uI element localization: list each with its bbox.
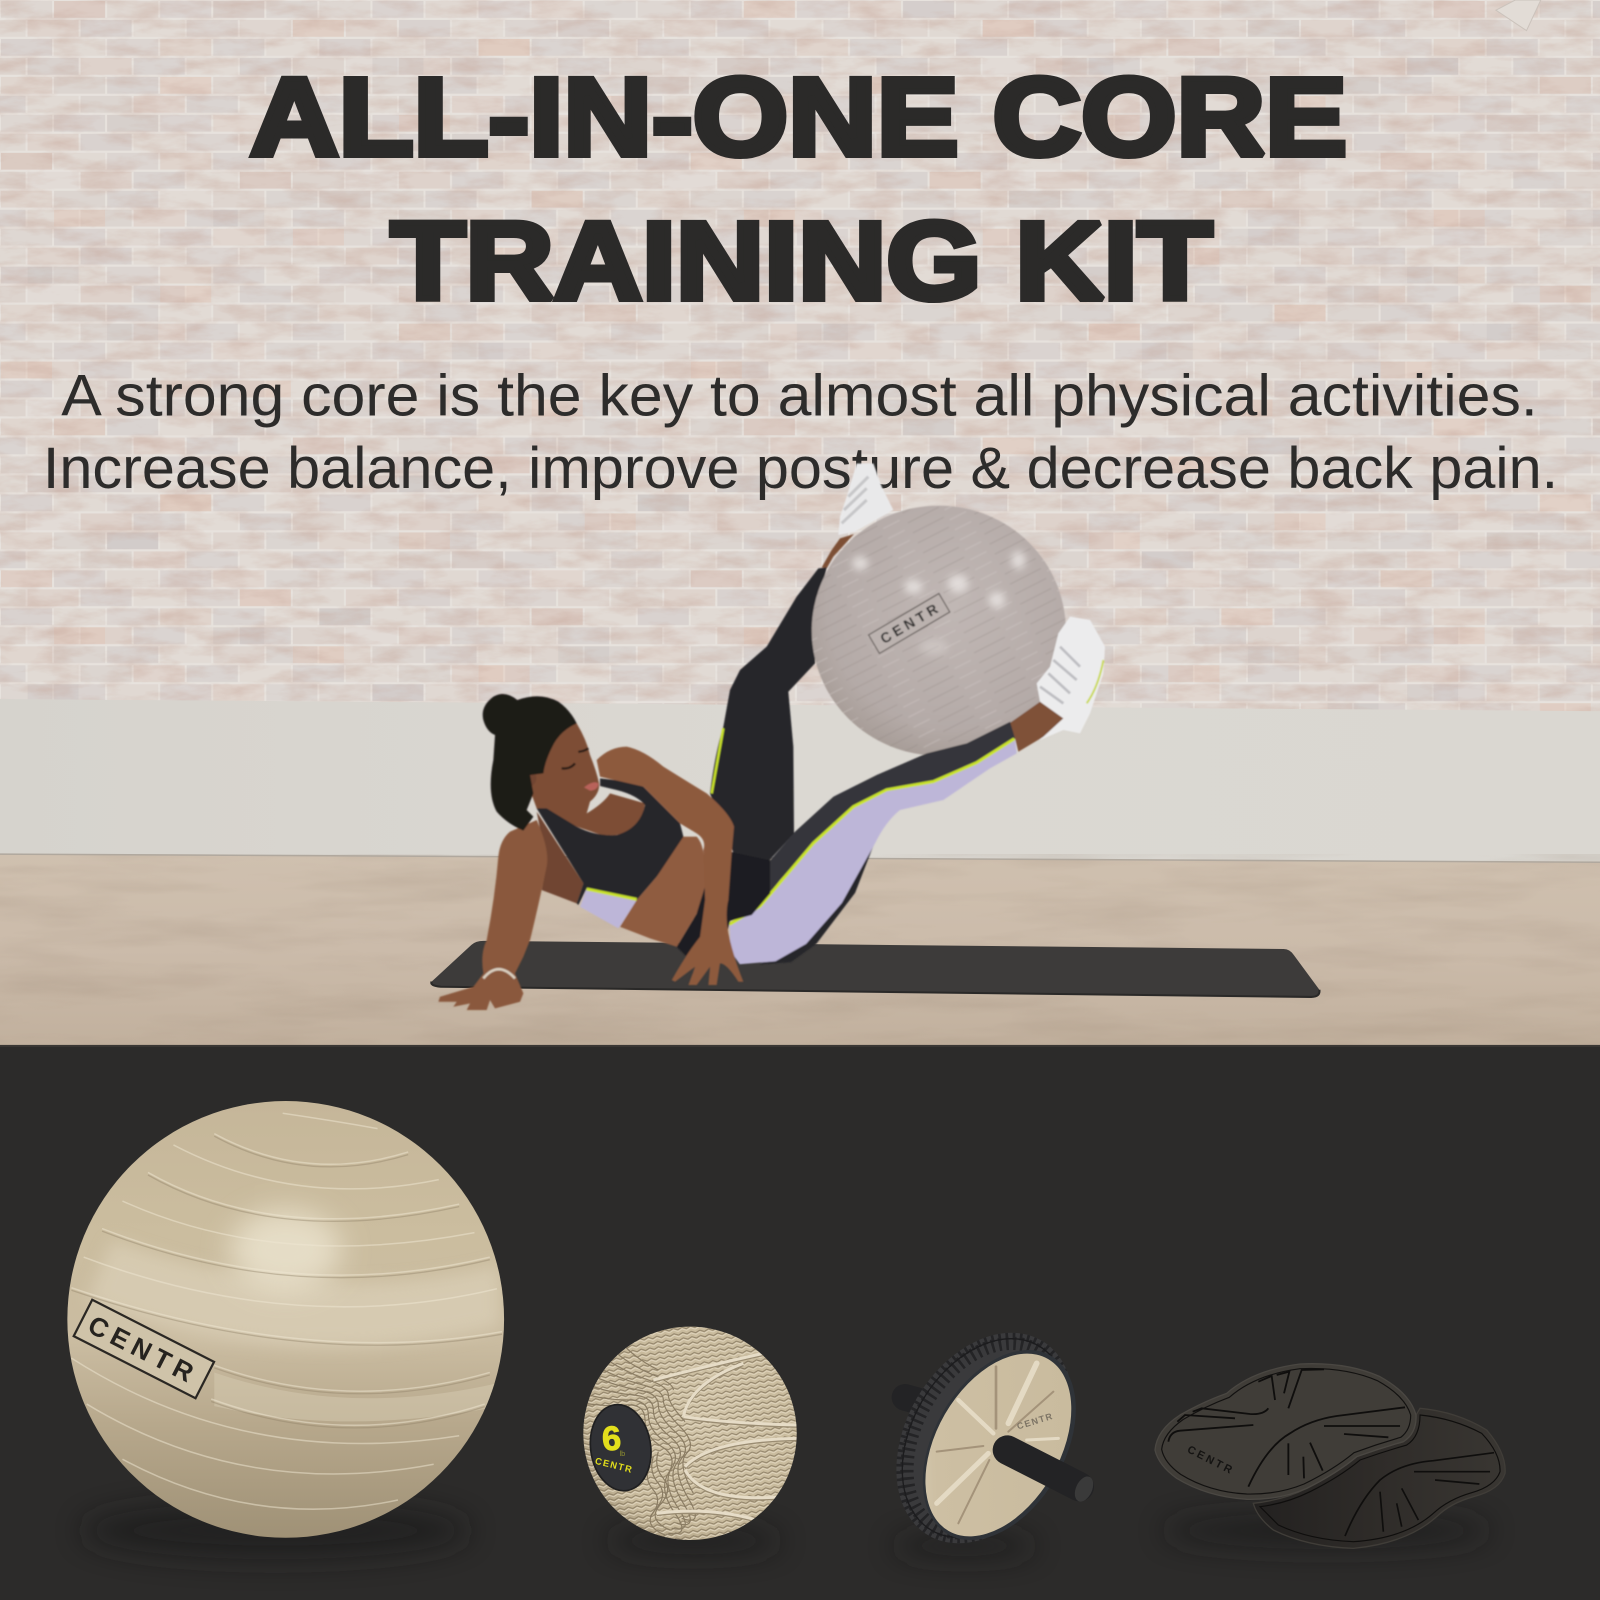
lips [584,782,598,791]
extended leg shoe [1037,617,1105,740]
panel: dark product area [0,1045,1600,1600]
wheel near handle [1007,1450,1097,1504]
subtitle text [43,363,1558,501]
raised leg in black leggings [710,567,827,863]
logo: CENTR on product ball: CENTR [83,1310,203,1391]
logo: CENTR on stability ball: CENTR [878,600,944,648]
product: back slider disc [1253,1408,1505,1548]
logo: CENTR on slider: CENTR [1185,1444,1236,1478]
ear [514,769,536,788]
stability ball [812,506,1066,756]
wheel far handle [905,1397,927,1403]
right arm and hand [597,747,743,985]
crop top black [537,778,683,905]
product: stability ball [67,1101,504,1538]
eyes [562,748,588,768]
title: ALL-IN-ONE CORE [250,56,1347,179]
extended leg underside [760,843,874,964]
medicine ball weight cap: lb [619,1449,625,1458]
subtitle text: Increase balance, improve posture & decrease back pain. [43,436,1558,501]
slider grooves [1168,1369,1405,1487]
medicine ball weight cap [585,1401,656,1495]
logo: CENTR on stability ball [869,594,950,653]
title: TRAINING KIT [391,200,1212,323]
raised leg ankle [822,534,854,568]
background: white skirting wall [0,699,1600,865]
lower body group traced in local coords [710,463,893,863]
raised ridges [653,1355,797,1522]
wheel hub face: CENTR [1016,1411,1055,1431]
back skin [537,812,583,903]
background: studio floor [0,854,1600,1047]
product: ab wheel [892,1332,1094,1544]
product: front slider disc [1155,1364,1416,1499]
extended leg lavender panel [730,739,1017,964]
waist and back skin [620,837,705,947]
wheel hub face [891,1323,1107,1567]
left supporting arm and hand [438,820,547,1010]
extended leg ankle [1009,702,1063,752]
wavy texture lines [585,1347,695,1535]
upper body traced in local coords [438,694,770,1010]
face, neck and chest [513,723,645,835]
product: medicine ball [583,1327,797,1540]
ball sheen bands [87,1240,500,1347]
extended leg traced in local coords [740,617,1105,907]
title [250,56,1347,323]
crop top neon piping [587,889,637,899]
back slider grooves [1345,1453,1494,1536]
hip black [677,847,770,957]
product shadows [82,1502,1490,1559]
wheel tire [896,1332,1068,1544]
bracelet [483,969,515,978]
raised leg shoe [838,463,893,535]
exercise mat [431,941,1319,997]
crop top lavender panel [580,888,637,928]
hair [483,694,577,831]
extended leg neon piping [730,739,1014,924]
extended leg dark panel [740,722,1015,907]
subtitle text: A strong core is the key to almost all physical activities. [61,363,1538,428]
medicine ball weight cap: 6 [601,1419,622,1459]
background: brick wall [0,0,1600,719]
photo: athlete with stability ball [438,463,1105,1010]
medicine ball weight cap: CENTR [594,1456,634,1475]
